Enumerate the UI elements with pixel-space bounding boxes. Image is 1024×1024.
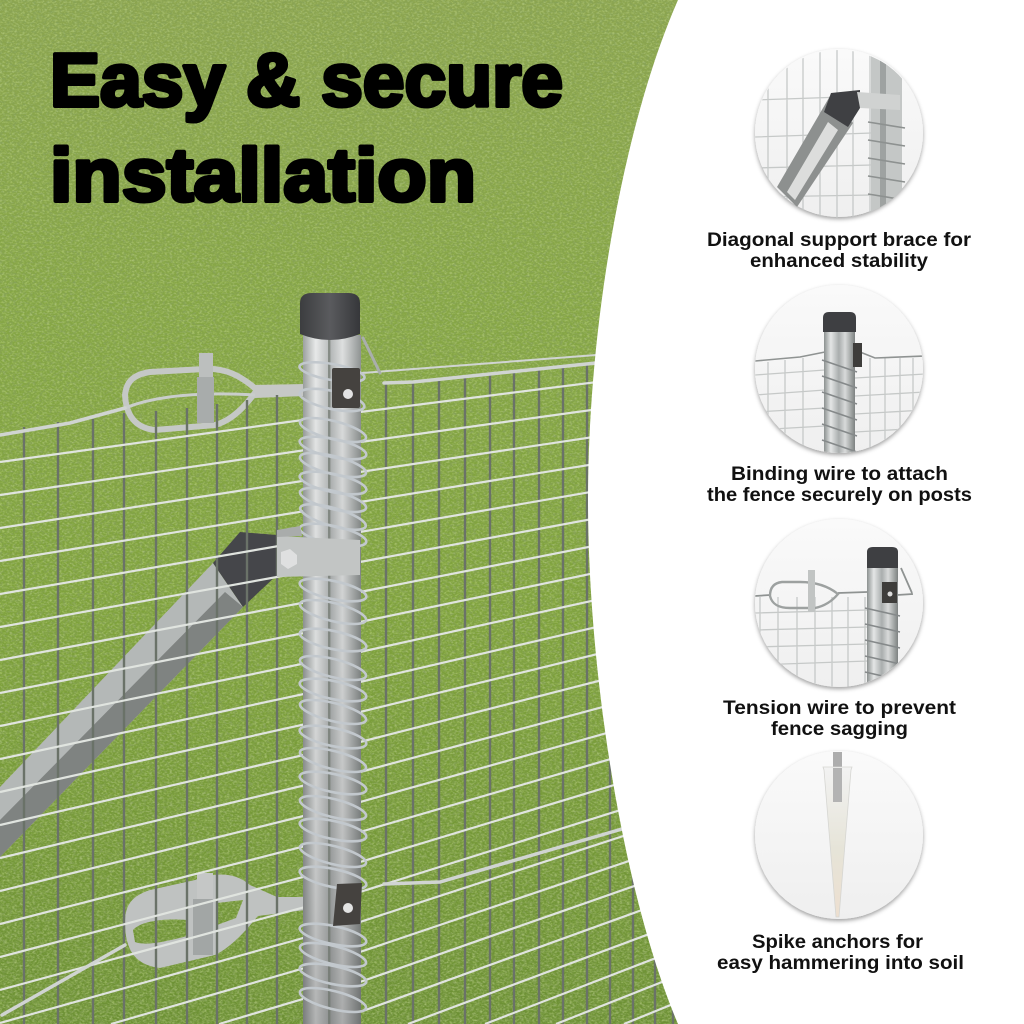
caption: easy hammering into soil	[717, 952, 964, 974]
circle image: spike	[755, 751, 923, 919]
upper wire clip	[332, 368, 360, 408]
lower wire clip	[333, 883, 362, 926]
circle image: tensioner and post	[755, 519, 923, 690]
post cap	[300, 293, 360, 340]
circle image: post with binding wire	[755, 285, 925, 457]
caption: Tension wire to prevent	[723, 697, 957, 719]
feature 4: spike anchor	[717, 751, 964, 974]
title	[50, 38, 563, 217]
caption: Diagonal support brace for	[707, 229, 971, 251]
feature 1: diagonal support brace	[707, 49, 971, 272]
binding wire coils	[298, 358, 368, 1017]
feature 2: binding wire	[707, 285, 972, 506]
caption: the fence securely on posts	[707, 484, 972, 506]
photo: grass background	[0, 0, 700, 1024]
caption	[717, 931, 964, 974]
caption	[723, 697, 957, 740]
wire mesh: vertical wires	[24, 364, 673, 1024]
title: installation	[50, 133, 476, 217]
brace bracket on post	[277, 526, 360, 577]
upper wire tensioner	[125, 353, 305, 430]
white curved panel	[588, 0, 1024, 1024]
caption: Spike anchors for	[752, 931, 923, 953]
caption: Binding wire to attach	[731, 463, 948, 485]
feature 3: tension wire	[723, 519, 957, 740]
caption	[707, 463, 972, 506]
fence post	[300, 293, 361, 1024]
diagonal brace	[0, 532, 277, 857]
tension wires	[0, 338, 622, 1015]
caption: enhanced stability	[750, 250, 928, 272]
caption	[707, 229, 971, 272]
lower wire tensioner	[125, 873, 305, 968]
circle image: brace detail	[755, 49, 923, 220]
wire mesh: horizontal wires	[0, 369, 700, 1024]
title: Easy & secure	[50, 38, 563, 122]
caption: fence sagging	[771, 718, 908, 740]
